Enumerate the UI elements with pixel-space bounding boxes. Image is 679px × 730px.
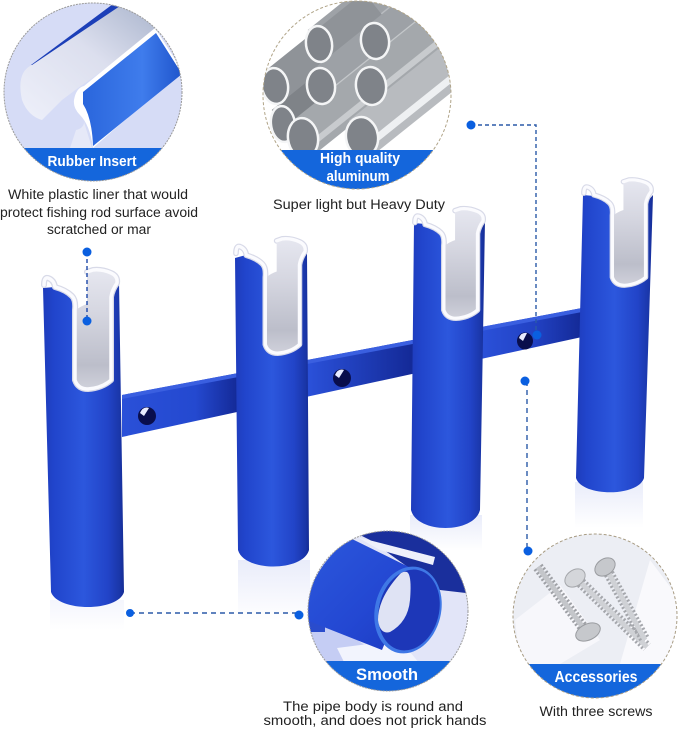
tube 2 (235, 239, 309, 566)
description: smooth, and does not prick hands (264, 713, 487, 728)
tube 4 (576, 180, 653, 492)
panel: smooth (264, 525, 487, 728)
callout connector: rubber insert (82, 248, 92, 326)
callout connector: aluminum (466, 120, 542, 340)
heading: High quality (320, 150, 401, 167)
description: White plastic liner that would (8, 187, 188, 202)
photo: liner close-up (4, 3, 182, 181)
heading (320, 150, 401, 185)
description (0, 187, 198, 237)
description: Super light but Heavy Duty (273, 197, 445, 212)
heading: Rubber Insert (48, 153, 137, 170)
description: With three screws (540, 704, 653, 719)
callout connector: smooth (126, 609, 304, 620)
description: The pipe body is round and (283, 699, 463, 714)
description (264, 699, 487, 728)
panel: rubber insert (0, 0, 198, 237)
heading: Accessories (554, 669, 638, 686)
photo: three screws (510, 530, 679, 700)
rod holder product (43, 180, 653, 607)
panel: accessories (510, 530, 679, 719)
photo: pipe end (308, 531, 468, 691)
tube 1 (43, 270, 124, 607)
photo: aluminum tubes (263, 1, 451, 189)
description: protect fishing rod surface avoid (0, 205, 198, 220)
floor shadows (50, 482, 643, 630)
callout connector: accessories (520, 376, 532, 556)
heading: aluminum (326, 168, 390, 185)
heading: Smooth (356, 665, 418, 684)
tube 3 (411, 209, 485, 528)
connecting bar (122, 308, 582, 437)
description: scratched or mar (47, 222, 152, 237)
screw holes (138, 332, 533, 425)
panel: high quality aluminum (262, 0, 452, 212)
